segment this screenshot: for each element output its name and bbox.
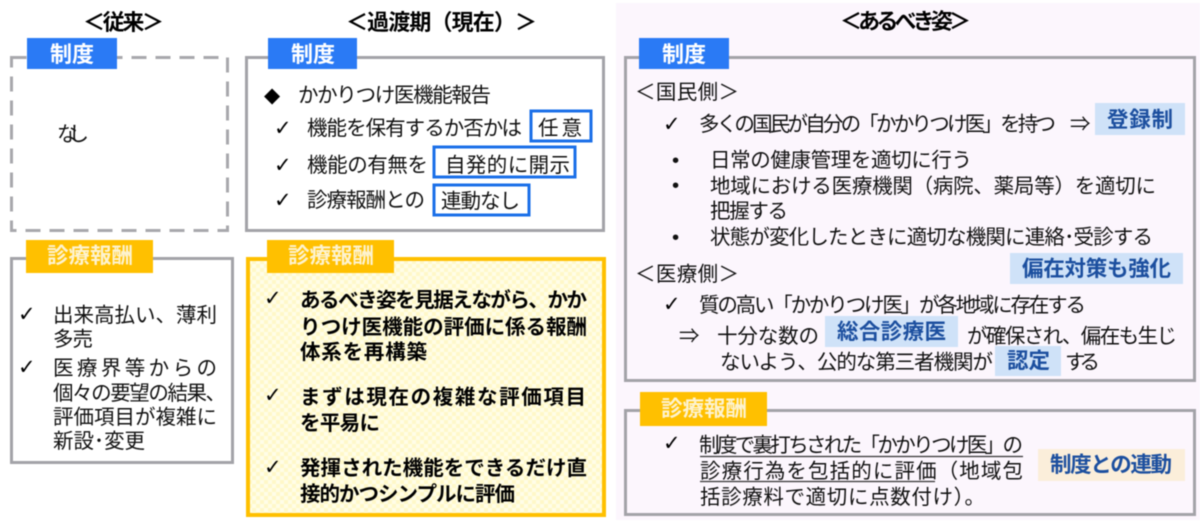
section: providers: ないよう、公的な第三者機関が (720, 351, 993, 374)
section: providers: が確保され、偏在も生じ (967, 325, 1177, 348)
list: transition fee items: ✓ (264, 455, 282, 479)
list: conventional fee items: 新設･変更 (53, 430, 145, 453)
list: conventional fee items: 多売 (53, 328, 93, 351)
label: certification: 認定 (1007, 349, 1050, 373)
item: function report: かかりつけ医機能報告 (298, 84, 491, 107)
label: linked with system: 制度との連動 (1050, 453, 1172, 477)
tab: fee: 診療報酬 (47, 244, 133, 268)
tab: system: 制度 (662, 42, 706, 67)
section: providers: 質の高い「かかりつけ医」が各地域に存在する (699, 294, 1086, 317)
section: citizens: 多くの国民が自分の「かかりつけ医」を持つ (699, 113, 1056, 136)
list: transition fee items: 接的かつシンプルに評価 (300, 483, 515, 506)
list: conventional fee items: 個々の要望の結果、 (53, 382, 226, 405)
column: ideal (626, 9, 1194, 514)
tab: system: 制度 (291, 42, 335, 67)
panel: conventional system (12, 38, 228, 230)
panel: ideal system (626, 38, 1194, 380)
item: optional: 任意 (538, 117, 582, 140)
heading: ideal: ＜あるべき姿＞ (840, 9, 971, 34)
right column background (616, 3, 1200, 520)
section: citizens: • (672, 149, 679, 172)
column: conventional (12, 10, 232, 462)
text: comprehensive evaluation: 制度で裏打ちされた「かかりつけ医」の (699, 434, 1023, 457)
item: optional: ✓ (274, 116, 292, 140)
label: registration (1095, 103, 1185, 135)
list: conventional fee items: 評価項目が複雑に (53, 406, 217, 429)
text: comprehensive evaluation: 括診療料で適切に点数付け）。 (700, 486, 985, 509)
label: maldistribution (1010, 253, 1183, 284)
item: not linked (274, 185, 529, 215)
section: citizens: ⇒ (1070, 113, 1090, 136)
text: comprehensive evaluation: ✓ (663, 431, 681, 455)
label: linked with system (1038, 449, 1185, 481)
label: maldistribution: 偏在対策も強化 (1022, 257, 1171, 281)
item: function report: ◆ (264, 83, 281, 107)
list: conventional fee items (18, 302, 226, 453)
section: providers: 十分な数の (717, 325, 819, 348)
section: providers: する (1065, 351, 1100, 374)
section: providers: ⇒ (679, 325, 700, 348)
label: registration: 登録制 (1107, 108, 1173, 132)
column: transition (246, 10, 604, 515)
list: transition fee items: ✓ (264, 383, 282, 407)
panel: conventional fee (12, 240, 232, 462)
item: voluntary disclosure: 自発的に開示 (445, 154, 570, 177)
section: providers: ＜医療側＞ (635, 263, 739, 286)
list: conventional fee items: ✓ (18, 355, 36, 379)
tab: fee (26, 240, 153, 273)
list: transition fee items: まずは現在の複雑な評価項目 (300, 386, 586, 409)
section: citizens: 把握する (710, 200, 788, 223)
tab: fee (640, 392, 767, 426)
list: transition fee items: ✓ (264, 286, 282, 310)
item: voluntary disclosure: 機能の有無を (307, 154, 428, 177)
tab: system (268, 38, 357, 69)
item: voluntary disclosure (274, 147, 575, 177)
panel: ideal fee (626, 392, 1194, 514)
section: citizens (635, 81, 1185, 249)
text: comprehensive evaluation (663, 431, 1023, 509)
text: comprehensive evaluation: 診療行為を包括的に評価（地域包 (700, 460, 1023, 483)
tab: system (27, 38, 117, 69)
list: conventional fee items: 医療界等からの (53, 357, 217, 380)
section: citizens: ✓ (663, 112, 681, 136)
list: transition fee items: 体系を再構築 (300, 341, 427, 364)
label: general physician: 総合診療医 (837, 320, 946, 344)
list: transition fee items: あるべき姿を見据えながら、かか (300, 288, 588, 312)
text: none: なし (57, 123, 89, 146)
list: transition fee items: を平易に (300, 412, 380, 435)
list: conventional fee items: ✓ (18, 302, 36, 326)
section: citizens: • (672, 226, 679, 249)
item: voluntary disclosure: ✓ (274, 153, 292, 177)
section: citizens: • (672, 174, 679, 197)
item: not linked: ✓ (274, 188, 292, 212)
panel: transition fee (248, 240, 604, 515)
heading: conventional: ＜従来＞ (83, 10, 164, 35)
list: transition fee items (264, 286, 588, 506)
section: citizens: ＜国民側＞ (635, 81, 739, 104)
heading: transition: ＜過渡期（現在）＞ (346, 10, 537, 35)
item: optional: 機能を保有するか否かは (307, 117, 522, 140)
section: providers (635, 253, 1183, 376)
tab: system (639, 38, 729, 69)
section: citizens: 地域における医療機関（病院、薬局等）を適切に (710, 175, 1156, 198)
tab: system: 制度 (50, 42, 94, 67)
label: certification (995, 346, 1061, 376)
list: transition fee items: 発揮された機能をできるだけ直 (300, 457, 587, 480)
section: citizens: 状態が変化したときに適切な機関に連絡･受診する (710, 226, 1153, 249)
tab: fee: 診療報酬 (661, 397, 747, 421)
section: providers: ✓ (663, 292, 681, 316)
label: general physician (825, 316, 958, 347)
item: not linked: 連動なし (441, 190, 520, 213)
section: citizens: 日常の健康管理を適切に行う (710, 149, 972, 172)
tab: fee: 診療報酬 (288, 244, 374, 268)
item: not linked: 診療報酬との (307, 189, 425, 212)
panel: transition system (246, 38, 604, 230)
tab: fee (267, 240, 394, 273)
list: transition fee items: りつけ医機能の評価に係る報酬 (300, 316, 587, 339)
list: conventional fee items: 出来高払い、薄利 (53, 304, 217, 327)
item: optional (274, 111, 591, 141)
